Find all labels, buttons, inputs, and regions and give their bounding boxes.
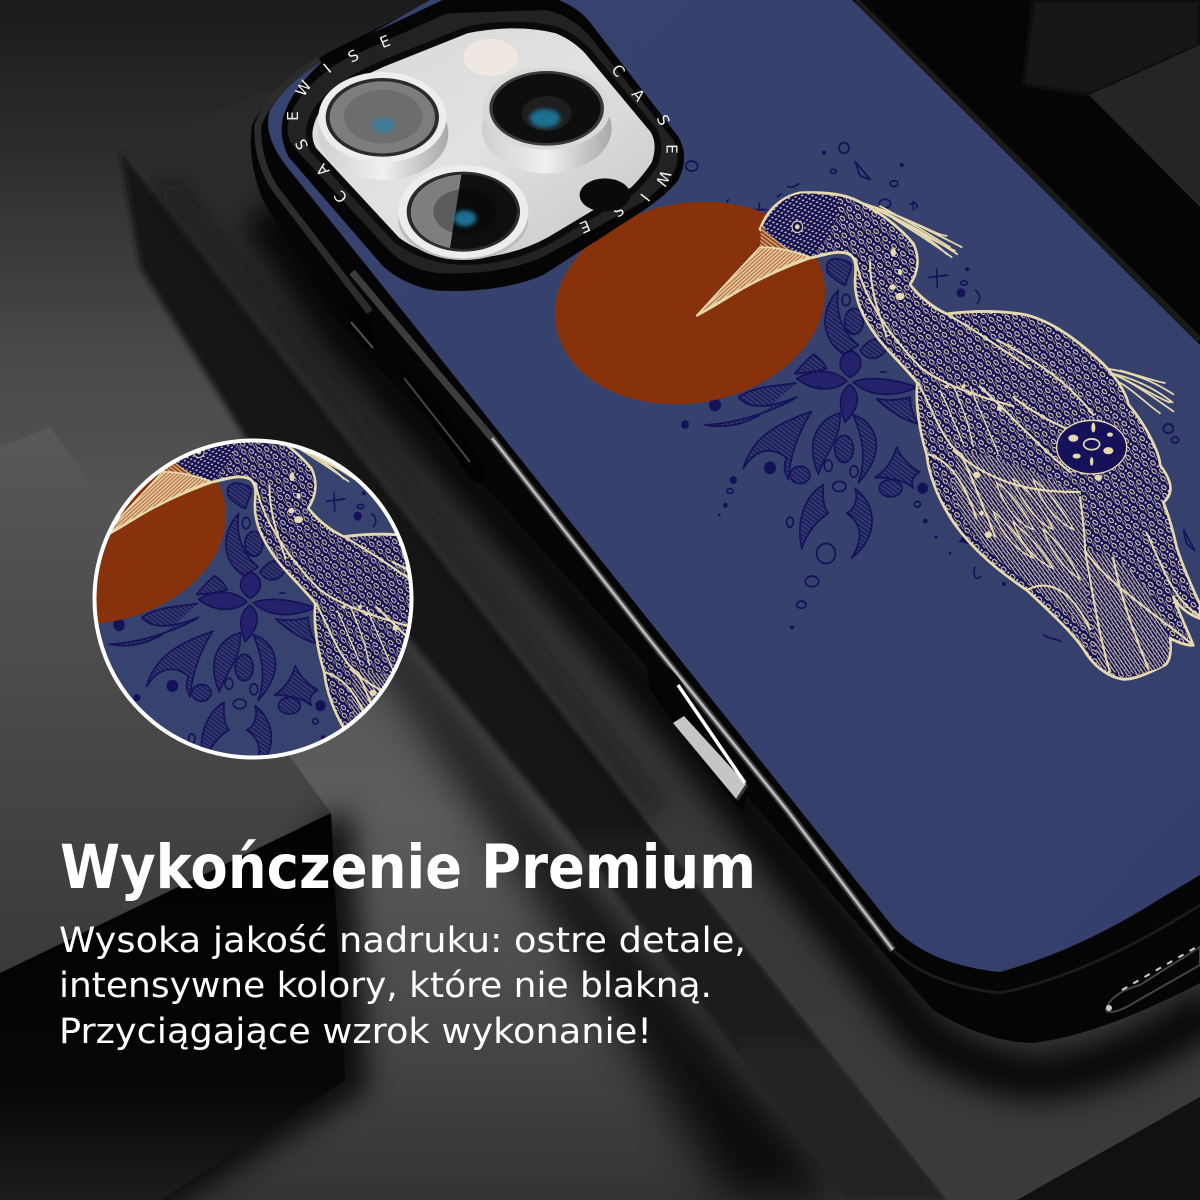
brand letters left: S bbox=[345, 46, 362, 67]
heading: Wykończenie Premium bbox=[60, 832, 756, 903]
button slots on phone side bbox=[345, 302, 484, 483]
heron neck spots bbox=[889, 248, 1003, 538]
background: top right dark wall bbox=[840, 0, 1200, 345]
brand letters right: E bbox=[577, 216, 593, 237]
phone soft shadow bbox=[262, 210, 1200, 1077]
heron feather outlines bbox=[857, 261, 1198, 672]
background: large block side face bbox=[120, 150, 947, 1200]
background: top right wall panel bbox=[1023, 0, 1200, 95]
background: lower ground shadow near block bbox=[240, 450, 847, 1200]
lens: top left bbox=[318, 72, 448, 180]
brand letters right: S bbox=[653, 112, 673, 128]
background: small block shadow bbox=[60, 813, 368, 1200]
heron tail feathers bbox=[1083, 550, 1173, 675]
brand letters right: E bbox=[662, 144, 680, 154]
heron body bbox=[760, 193, 1200, 679]
body text: Wysoka jakość nadruku: ostre detale, bbox=[59, 921, 746, 961]
brand letters left: E bbox=[284, 111, 302, 121]
bottom inner lip bbox=[893, 905, 1200, 993]
brand letters left: W bbox=[292, 77, 315, 100]
brand letters right: A bbox=[628, 85, 649, 105]
phone case body bbox=[251, 0, 1200, 1043]
island lettered ring bbox=[287, 10, 677, 273]
artwork: heron bbox=[697, 193, 1200, 679]
lens: bottom bbox=[398, 165, 528, 260]
brand letters left bbox=[284, 32, 393, 206]
beak lower lip bbox=[697, 252, 857, 316]
printed artwork bbox=[539, 142, 1200, 679]
background: top right block surface bbox=[1089, 45, 1200, 207]
brand letters left: A bbox=[312, 160, 333, 179]
background: dark falloff along block edge bbox=[165, 185, 655, 810]
background: small block front face bbox=[0, 813, 345, 1200]
brand letters left: I bbox=[320, 60, 335, 77]
lens: top right bbox=[482, 67, 612, 173]
flash bbox=[463, 39, 518, 76]
body text: intensywne kolory, które nie blakną. bbox=[59, 966, 712, 1006]
brand letters left: S bbox=[292, 136, 312, 152]
brand letters left: E bbox=[377, 32, 393, 52]
brand letters right: I bbox=[636, 190, 653, 204]
case left lip bbox=[258, 60, 370, 312]
glass camera plate bbox=[309, 25, 658, 262]
heron medallion bbox=[1057, 420, 1127, 480]
brand letters right: W bbox=[652, 168, 674, 189]
brand letters left: C bbox=[331, 187, 351, 206]
metal side button bbox=[647, 664, 750, 812]
side gloss highlight bbox=[492, 438, 893, 950]
brand letters right bbox=[577, 61, 680, 237]
bottom USB port bbox=[1106, 945, 1200, 1012]
side gloss soft band bbox=[352, 272, 893, 950]
heron head bbox=[763, 193, 840, 257]
artwork: rust sun bbox=[539, 181, 841, 425]
case top right edge bbox=[856, 0, 1200, 340]
camera island bbox=[282, 0, 684, 291]
phone back panel bbox=[268, 0, 1200, 972]
heron wing feathers bbox=[953, 453, 1090, 629]
body text: Przyciągające wzrok wykonanie! bbox=[59, 1012, 652, 1052]
heron face over sun bbox=[760, 226, 811, 258]
body text bbox=[59, 921, 746, 1052]
background: small block top surface bbox=[0, 427, 331, 973]
background: bottom right block bbox=[1017, 1097, 1200, 1200]
heron crest feathers bbox=[847, 199, 962, 257]
artwork: scattered dots and stars bbox=[686, 142, 1195, 642]
artwork: navy flower bbox=[705, 259, 920, 558]
heron tail plume bbox=[1107, 369, 1173, 413]
island black frame bbox=[282, 0, 684, 291]
brand letters right: S bbox=[609, 200, 627, 221]
zoom inset circle bbox=[92, 438, 414, 760]
microphone hole bbox=[580, 178, 630, 212]
heron eye bbox=[792, 221, 803, 232]
heron beak bbox=[697, 247, 810, 316]
brand letters right: C bbox=[608, 61, 628, 81]
